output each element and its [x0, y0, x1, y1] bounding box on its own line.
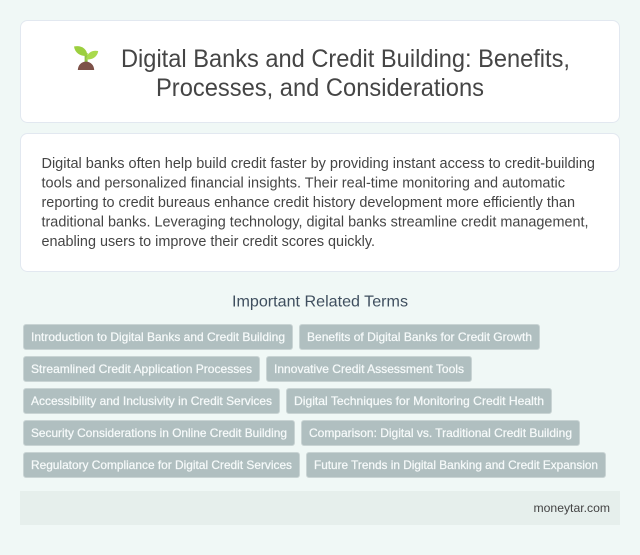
footer bar — [20, 491, 620, 525]
tag: comparison — [302, 420, 580, 446]
icon: seedling — [74, 46, 98, 70]
summary paragraph: reporting to credit bureaus enhance credit history development more efficiently than — [42, 195, 575, 211]
tag: benefits — [300, 324, 540, 350]
title: Processes, and Considerations — [156, 74, 484, 102]
tag: benefits: Benefits of Digital Banks for Credit Growth — [307, 330, 532, 344]
title — [121, 45, 570, 102]
tag: future trends: Future Trends in Digital Banking and Credit Expansion — [314, 458, 598, 472]
summary paragraph: enabling users to improve their credit scores quickly. — [42, 234, 375, 250]
tag: innovative — [266, 356, 472, 382]
footer source: moneytar.com — [534, 501, 610, 515]
tag: security — [24, 420, 294, 446]
tag: comparison: Comparison: Digital vs. Traditional Credit Building — [309, 426, 572, 440]
tag: monitoring: Digital Techniques for Monitoring Credit Health — [294, 394, 544, 408]
panel: header card — [20, 20, 620, 122]
summary paragraph: traditional banks. Leveraging technology, digital banks streamline credit management, — [42, 214, 588, 230]
tag: introduction — [24, 324, 292, 350]
summary paragraph: Digital banks often help build credit faster by providing instant access to credit-building — [42, 156, 595, 172]
tag: introduction: Introduction to Digital Banks and Credit Building — [31, 330, 285, 344]
summary paragraph — [42, 156, 595, 250]
tag: regulatory — [24, 452, 300, 478]
tag: future trends — [306, 452, 606, 478]
tag: streamlined: Streamlined Credit Application Processes — [31, 362, 252, 376]
summary paragraph: tools and personalized financial insights. Their real-time monitoring and automatic — [42, 176, 565, 192]
tag: streamlined — [24, 356, 260, 382]
tag: accessibility — [24, 388, 280, 414]
title: Digital Banks and Credit Building: Benefits, — [121, 45, 570, 73]
tag: monitoring — [286, 388, 552, 414]
related term tags — [24, 324, 606, 478]
heading: important related terms: Important Related Terms — [232, 294, 408, 310]
panel: summary text card — [20, 134, 620, 272]
tag: accessibility: Accessibility and Inclusivity in Credit Services — [31, 394, 272, 408]
tag: security: Security Considerations in Online Credit Building — [31, 426, 287, 440]
tag: innovative: Innovative Credit Assessment Tools — [274, 362, 464, 376]
tag: regulatory: Regulatory Compliance for Digital Credit Services — [31, 458, 292, 472]
